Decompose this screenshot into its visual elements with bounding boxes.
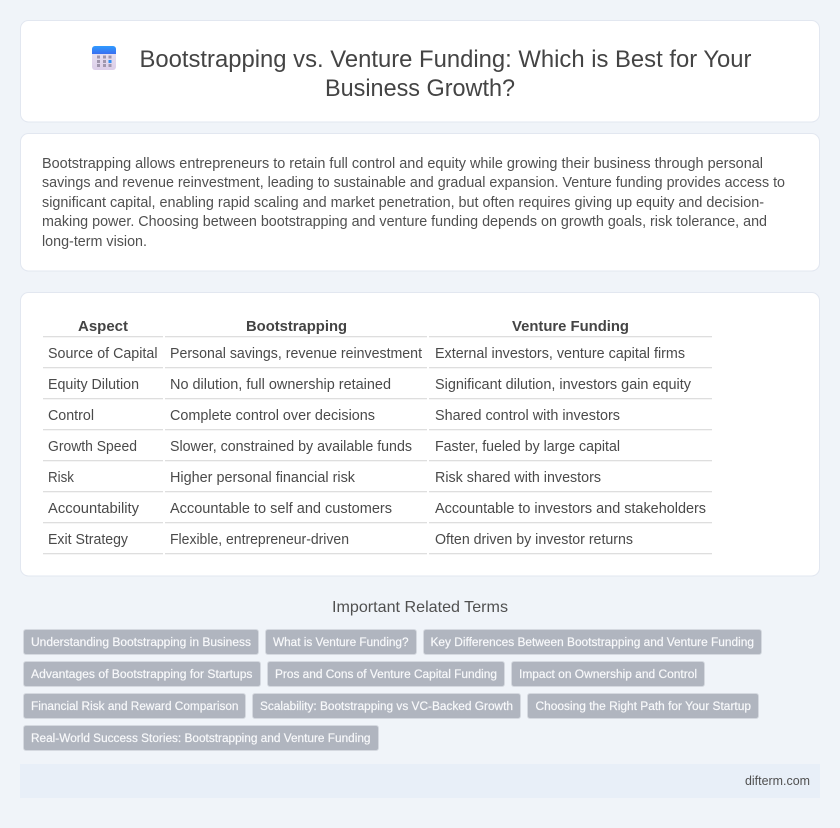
tag [24, 694, 246, 718]
tag: Key Differences Between Bootstrapping and Venture Funding [430, 635, 754, 649]
footer: difterm.com [745, 773, 810, 788]
panel: comparison table [20, 292, 820, 576]
table row: risk: Risk shared with investors [435, 470, 601, 486]
table row: growth speed: Growth Speed [48, 439, 137, 455]
table row: accountability: Accountable to self and customers [170, 501, 392, 517]
table header row: Bootstrapping [246, 319, 347, 335]
table row: accountability: Accountability [48, 501, 140, 517]
table row: accountability: Accountable to investors and stakeholders [435, 501, 706, 517]
table row: risk: Risk [48, 470, 75, 486]
table row: source of capital [43, 346, 712, 368]
text block: description: Bootstrapping allows entrepreneurs to retain full control and equity while growing their business through personal [42, 156, 763, 172]
tag [528, 694, 758, 718]
tag: Scalability: Bootstrapping vs VC-Backed Growth [260, 699, 513, 713]
title: Business Growth? [325, 75, 515, 102]
table row: growth speed [43, 439, 712, 461]
table row: equity dilution: Significant dilution, investors gain equity [435, 377, 692, 393]
table row: exit strategy: Exit Strategy [48, 532, 129, 548]
icon: calendar [92, 46, 116, 70]
text block: description: savings and revenue reinvestment, leading to sustainable and gradual expansion. Venture funding provides access to [42, 175, 785, 191]
tag [268, 662, 504, 686]
table row: source of capital: Source of Capital [48, 346, 158, 362]
table row: equity dilution: Equity Dilution [48, 377, 139, 393]
tag: Financial Risk and Reward Comparison [31, 699, 238, 713]
table row: risk [43, 470, 712, 492]
table row: equity dilution: No dilution, full ownership retained [170, 377, 391, 393]
tag: Advantages of Bootstrapping for Startups [31, 667, 252, 681]
heading: important related terms: Important Related Terms [332, 599, 508, 616]
table row: growth speed: Faster, fueled by large capital [435, 439, 620, 455]
tag: Real-World Success Stories: Bootstrapping and Venture Funding [31, 731, 370, 745]
footer [20, 764, 820, 798]
panel: description [20, 134, 820, 271]
table row: control: Shared control with investors [435, 408, 620, 424]
tag [24, 662, 260, 686]
text block: description: making power. Choosing between bootstrapping and venture funding depends on growth goals, risk tolerance, and [42, 214, 767, 230]
title: Bootstrapping vs. Venture Funding: Which is Best for Your [140, 46, 752, 73]
title [140, 46, 752, 102]
tag [252, 694, 520, 718]
table header row: Venture Funding [512, 319, 629, 335]
panel: header [20, 20, 820, 122]
table row: exit strategy [43, 532, 712, 554]
table header row [43, 319, 712, 337]
text block: description: long-term vision. [42, 234, 147, 250]
table row: source of capital: Personal savings, revenue reinvestment [170, 346, 422, 362]
tag [24, 630, 258, 654]
table row: exit strategy: Flexible, entrepreneur-driven [170, 532, 349, 548]
table row: accountability [43, 501, 712, 523]
tag: What is Venture Funding? [273, 635, 409, 649]
table row: source of capital: External investors, venture capital firms [435, 346, 685, 362]
table row: growth speed: Slower, constrained by available funds [170, 439, 412, 455]
tag: Understanding Bootstrapping in Business [31, 635, 251, 649]
tag: Impact on Ownership and Control [519, 667, 697, 681]
text block: description: significant capital, enabling rapid scaling and market penetration, but often requires giving up equity and decision- [42, 195, 764, 211]
table row: equity dilution [43, 377, 712, 399]
tag: Pros and Cons of Venture Capital Funding [275, 667, 497, 681]
table row: control: Complete control over decisions [170, 408, 375, 424]
table row: control [43, 408, 712, 430]
tag [24, 726, 378, 750]
tag: Choosing the Right Path for Your Startup [536, 699, 751, 713]
tag list [24, 630, 762, 750]
table header row: Aspect [78, 319, 128, 335]
table row: control: Control [48, 408, 94, 424]
tag [266, 630, 416, 654]
tag [424, 630, 762, 654]
table row: exit strategy: Often driven by investor returns [435, 532, 633, 548]
text block: description [42, 156, 785, 250]
table row: risk: Higher personal financial risk [170, 470, 356, 486]
tag [512, 662, 704, 686]
